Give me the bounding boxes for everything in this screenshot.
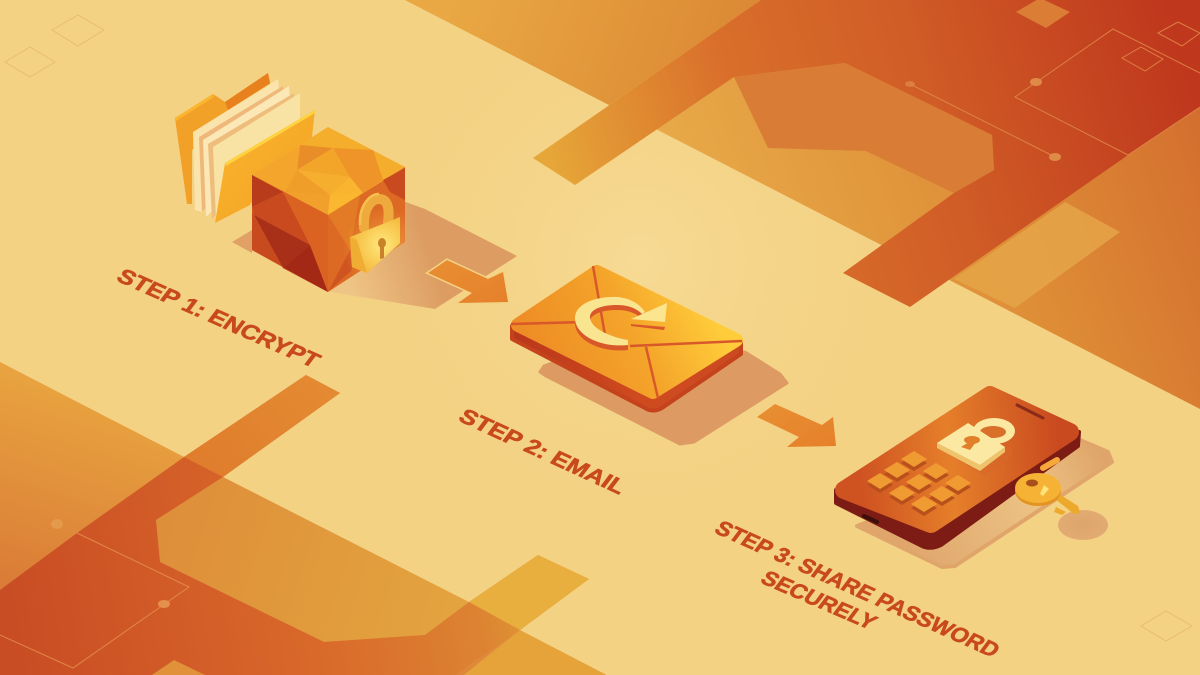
icon: smartphone <box>836 395 1079 548</box>
cube left face <box>252 175 328 292</box>
cube shadow <box>232 200 517 309</box>
phone padlock <box>937 418 1015 476</box>
cube right face <box>328 167 405 292</box>
label: step 3: STEP 3: SHARE PASSWORD <box>710 516 1005 662</box>
envelope shadow <box>540 352 787 444</box>
icon: email envelope <box>511 266 742 410</box>
icon: gold key <box>1015 473 1080 515</box>
icon: encrypted cube with padlock <box>252 127 405 292</box>
charging port <box>864 516 877 522</box>
speaker <box>1017 405 1043 418</box>
phone shadow <box>857 440 1112 567</box>
side button <box>1043 460 1057 468</box>
background circuit: top right <box>405 0 1200 409</box>
arrow: step 2 to step 3 <box>757 404 836 447</box>
icon: folder with documents <box>175 73 315 223</box>
key shadow <box>1058 510 1108 540</box>
padlock <box>350 194 400 273</box>
label: step 2: STEP 2: EMAIL <box>454 404 632 499</box>
background circuit: bottom left <box>0 362 620 675</box>
envelope folds <box>511 266 742 398</box>
refresh arrow <box>575 297 667 350</box>
arrow: step 1 to step 2 <box>428 260 508 303</box>
label: step 3: SECURELY <box>756 566 882 634</box>
cube top face <box>252 127 405 215</box>
keypad <box>867 451 971 516</box>
label: step 1: STEP 1: ENCRYPT <box>112 264 326 372</box>
